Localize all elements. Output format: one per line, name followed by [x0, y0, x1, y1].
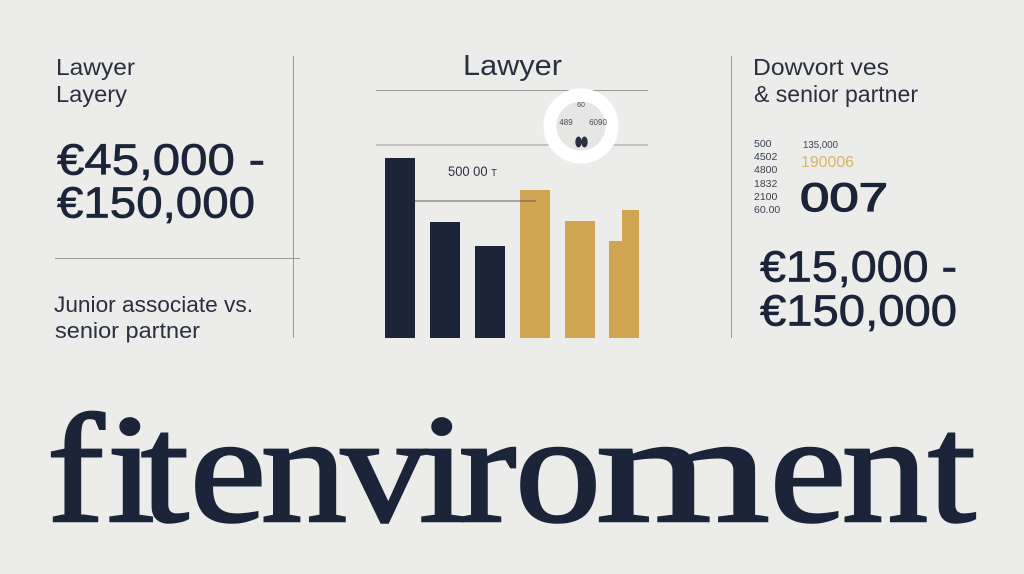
- left caption: Junior associate vs.: [54, 292, 253, 317]
- left caption: senior partner: [55, 318, 201, 343]
- left caption: [54, 292, 253, 343]
- gold figure: 190006: [801, 154, 854, 171]
- large wordmark: m: [596, 384, 770, 555]
- large wordmark: fitenviro: [47, 384, 601, 555]
- left heading: Layery: [56, 81, 128, 107]
- small figure top: 135,000: [803, 139, 838, 151]
- small figures column: 60.00: [754, 204, 780, 216]
- right salary range: €15,000 -: [760, 242, 957, 292]
- icon: white ring badge: 60: [577, 102, 585, 109]
- right salary range: €150,000: [760, 286, 957, 336]
- left heading: Lawyer: [56, 54, 135, 80]
- right heading: & senior partner: [754, 81, 918, 107]
- panel: right salary summary: [753, 54, 957, 336]
- panel: left salary summary: [54, 54, 265, 343]
- large figure: 007: [800, 176, 888, 220]
- bar chart: [385, 158, 639, 338]
- left salary range: €150,000: [57, 178, 255, 228]
- icon: white ring badge: 489: [559, 118, 573, 127]
- left salary range: €45,000 -: [57, 136, 265, 184]
- small figures column: 4502: [754, 151, 778, 163]
- center heading: Lawyer: [463, 50, 562, 82]
- small figures column: 1832: [754, 178, 778, 190]
- small figures column: 500: [754, 138, 772, 150]
- right salary range: [760, 242, 957, 336]
- right heading: [753, 54, 918, 107]
- large wordmark: ent: [770, 384, 976, 555]
- right heading: Dowvort ves: [753, 54, 889, 80]
- icon: white ring badge: [550, 95, 612, 157]
- small figures column: 4800: [754, 164, 778, 176]
- small figures column: 2100: [754, 191, 778, 203]
- bar chart: 500 00 T: [448, 164, 497, 179]
- left heading: [56, 54, 135, 107]
- left salary range: [57, 136, 265, 228]
- icon: white ring badge: 6090: [589, 118, 607, 127]
